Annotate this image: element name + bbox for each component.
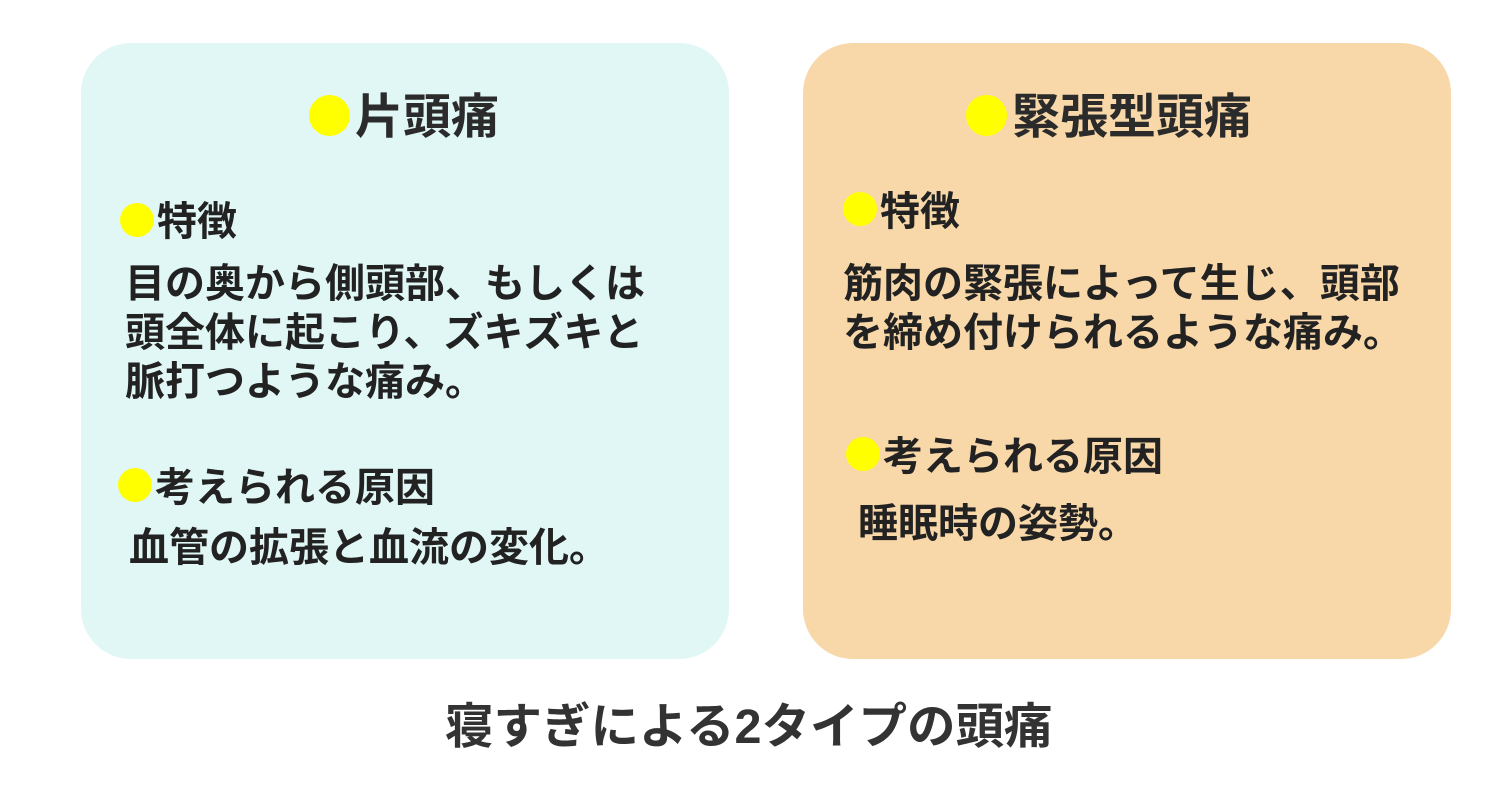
subheading: migraine features: 特徴 bbox=[157, 200, 237, 244]
icon: migraine causes dot bbox=[118, 468, 152, 502]
text: migraine features: 頭全体に起こり、ズキズキと bbox=[125, 311, 643, 355]
icon: tension causes dot bbox=[846, 437, 880, 471]
panel: migraine bbox=[81, 43, 729, 659]
icon: migraine features dot bbox=[120, 203, 154, 237]
icon: migraine heading dot bbox=[309, 95, 350, 136]
text: tension features: を締め付けられるような痛み。 bbox=[843, 311, 1403, 355]
heading: tension headache: 緊張型頭痛 bbox=[1012, 91, 1252, 144]
text: migraine features bbox=[125, 262, 645, 404]
text: tension features: 筋肉の緊張によって生じ、頭部 bbox=[843, 262, 1400, 306]
text: migraine causes: 血管の拡張と血流の変化。 bbox=[129, 526, 609, 570]
icon: tension features dot bbox=[843, 192, 877, 226]
subheading: tension causes: 考えられる原因 bbox=[883, 435, 1163, 479]
caption: 寝すぎによる2タイプの頭痛 bbox=[445, 700, 1053, 754]
text: migraine features: 目の奥から側頭部、もしくは bbox=[125, 262, 645, 306]
subheading: migraine causes: 考えられる原因 bbox=[155, 466, 435, 510]
icon: tension heading dot bbox=[966, 95, 1007, 136]
text: tension causes: 睡眠時の姿勢。 bbox=[858, 502, 1138, 546]
text: tension features bbox=[843, 262, 1403, 355]
text: migraine features: 脈打つような痛み。 bbox=[125, 360, 485, 404]
heading: migraine: 片頭痛 bbox=[355, 91, 499, 144]
panel: tension headache bbox=[803, 43, 1451, 659]
subheading: tension features: 特徴 bbox=[880, 190, 960, 234]
